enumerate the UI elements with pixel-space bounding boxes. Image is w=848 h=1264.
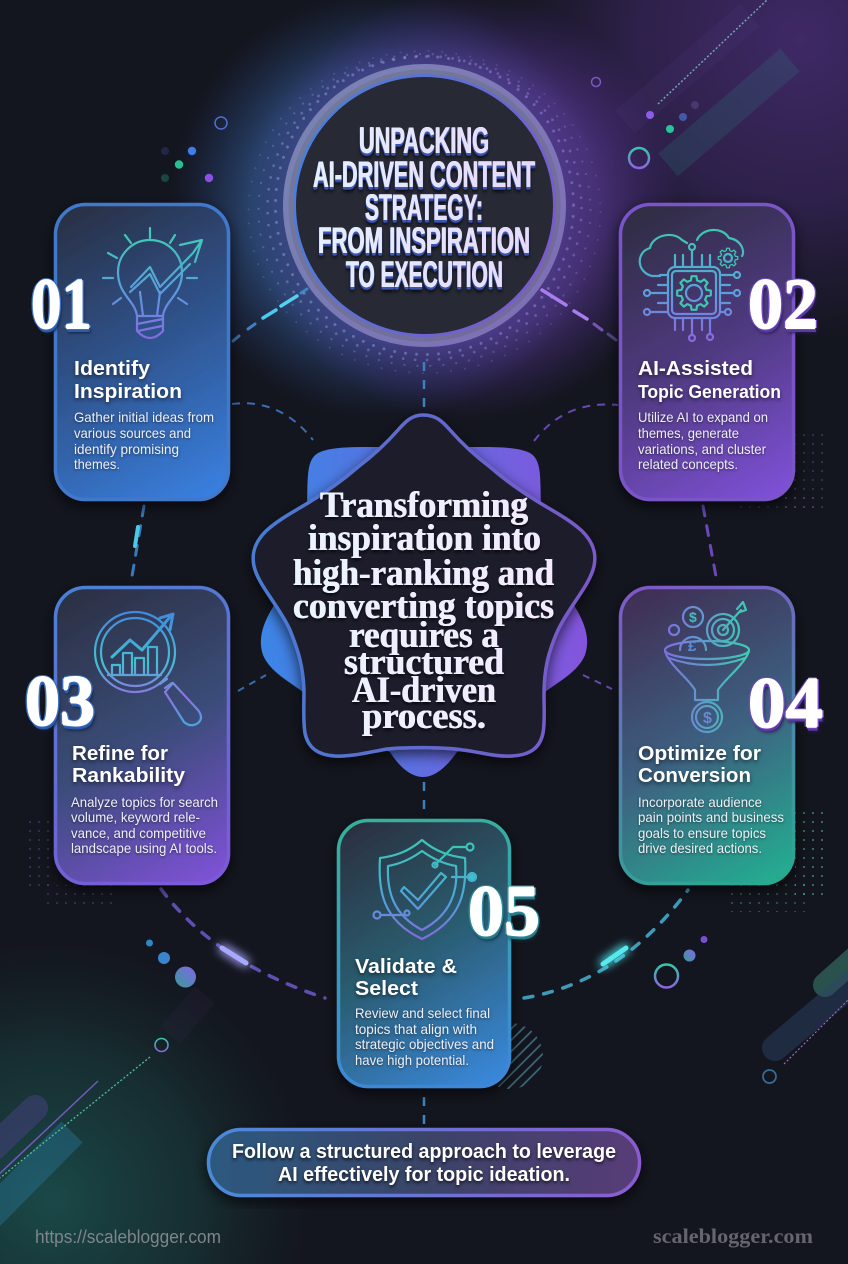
heading [74,358,182,403]
icon glyphs: currency: $ [689,609,697,625]
title: STRATEGY: [365,187,483,228]
connector: step 5 to summary [423,1097,425,1124]
centre statement: inspiration into [308,518,541,559]
dotted halo [248,51,600,373]
heading: Optimize for [638,743,761,765]
summary text: AI effectively for topic ideation. [278,1164,570,1186]
heading: Validate & [355,956,457,978]
connector: step 3 to centre [238,675,266,691]
centre statement: converting topics [293,586,554,627]
description: topics that align with [355,1021,477,1037]
front star [253,415,595,756]
connector: hub to step 2 [542,290,616,340]
centre statement: Transforming [320,485,528,526]
description: vance, and competitive [71,825,206,841]
description: themes, generate [638,425,739,441]
heading: Select [355,978,418,1000]
icon: funnel with coins and target [665,602,749,732]
centre statement [293,485,554,737]
description [355,1005,494,1068]
central star callout [253,415,595,777]
decoration: top left dots [161,117,227,182]
panel: step 1 [31,204,228,500]
summary text: Follow a structured approach to leverage [232,1141,616,1163]
title: AI-DRIVEN CONTENT [313,154,535,195]
centre statement: requires a [349,615,499,656]
panel: step 4 [620,588,823,884]
footer: url: https://scaleblogger.com [35,1227,221,1247]
summary pill [208,1130,640,1196]
description: Incorporate audience [638,794,762,810]
connector: centre to step 5 [423,782,425,816]
description: related concepts. [638,456,738,472]
decoration: bottom right shapes [655,936,848,1083]
heading [638,358,781,402]
number 05: 05 [468,871,540,951]
decoration: top right shapes [592,0,790,168]
heading: Refine for [72,743,168,765]
title: UNPACKING [359,120,489,161]
icon glyphs: currency: £ [688,638,697,655]
description: pain points and business [638,809,784,825]
footer: brand: scaleblogger.com [653,1224,814,1248]
icon glyphs: currency: $ [703,710,712,727]
panel: step 5 [338,820,540,1086]
panel: step 2 [620,204,818,500]
connector: step 3 to step 5 [161,889,325,998]
connector: step 2 to centre [534,404,618,441]
back star [261,447,587,777]
description: Analyze topics for search [71,794,218,810]
description: Review and select final [355,1005,490,1021]
connector: step 1 to step 3 [131,506,144,582]
connector: step 4 to centre [583,675,612,689]
heading [72,743,186,787]
number 02: 02 [748,264,818,344]
centre statement: process. [362,696,486,737]
description: drive desired actions. [638,840,762,856]
heading: Identify [74,358,151,380]
description [71,794,218,856]
icon: magnifier with bar chart [95,612,201,725]
heading: Rankability [72,765,186,787]
connector: hub to step 1 [233,289,307,341]
hub circle with title [248,51,600,373]
icon: shield with check and circuit [374,840,476,939]
title: TO EXECUTION [346,254,503,295]
description: Gather initial ideas from [74,409,214,425]
description: have high potential. [355,1052,469,1068]
centre statement: AI-driven [352,670,496,711]
decoration: bottom left shapes [0,940,205,1225]
description [638,409,768,472]
description: various sources and [74,425,191,441]
description: goals to ensure topics [638,825,766,841]
panel: step 3 [25,588,228,884]
icon: light bulb with rising arrow [103,228,202,338]
description [74,409,214,472]
number 04: 04 [748,663,823,743]
heading: Topic Generation [638,382,781,402]
description: strategic objectives and [355,1036,494,1052]
description: identify promising [74,441,179,457]
heading [355,956,457,1000]
centre statement: structured [344,642,504,683]
icon glyphs: currency [688,609,712,727]
decoration: halftone patches [26,430,830,1095]
heading: AI-Assisted [638,358,753,380]
summary text [232,1141,616,1186]
heading: Conversion [638,765,751,787]
connector: step 2 to step 4 [703,506,717,582]
description [638,794,784,856]
icon: AI chip with clouds and gears [640,230,743,341]
centre statement: high-ranking and [293,553,554,594]
description: landscape using AI tools. [71,840,217,856]
description: variations, and cluster [638,441,766,457]
description: Utilize AI to expand on [638,409,768,425]
hub disc [288,70,560,342]
number 01: 01 [31,264,92,344]
connector: step 5 to step 4 [524,890,688,998]
heading: Inspiration [74,381,182,403]
heading [638,743,761,787]
title: FROM INSPIRATION [318,220,530,261]
connector: hub to centre [423,362,425,412]
connector: step 1 to centre [232,403,313,440]
description: volume, keyword rele- [71,809,200,825]
description: themes. [74,456,120,472]
title [313,120,535,295]
number 03: 03 [25,661,95,741]
